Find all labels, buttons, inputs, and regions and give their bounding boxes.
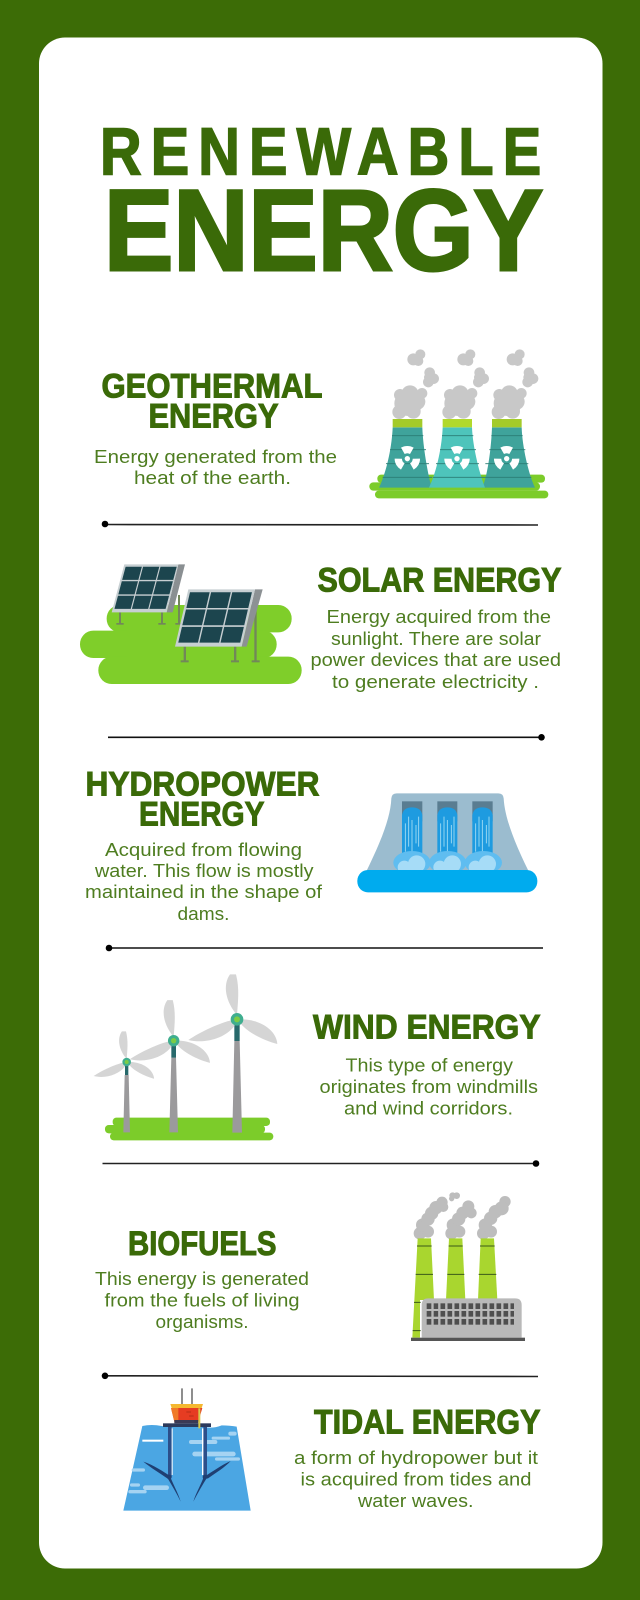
icon: cooling towers — [369, 349, 548, 498]
text: solar description: power devices that are used — [310, 649, 561, 670]
title: RENEWABLE — [100, 114, 541, 190]
text: hydropower description: water. This flow is mostly — [94, 860, 314, 881]
text: tidal description: water waves. — [357, 1490, 474, 1511]
text: solar description: to generate electricity . — [332, 671, 539, 692]
divider 2 — [108, 734, 545, 741]
icon: wind turbines — [94, 974, 277, 1140]
text: geothermal description — [94, 446, 337, 488]
panel: tidal energy — [123, 1388, 541, 1511]
panel: wind energy — [94, 974, 541, 1140]
text: hydropower description: Acquired from flowing — [105, 839, 302, 860]
heading: hydropower energy: HYDROPOWER — [86, 766, 320, 804]
text: solar description: sunlight. There are solar — [331, 628, 541, 649]
divider 4 — [102, 1160, 539, 1167]
heading: biofuels: BIOFUELS — [128, 1225, 276, 1263]
text: biofuels description — [95, 1268, 309, 1332]
panel: solar energy — [80, 562, 562, 692]
text: hydropower description: maintained in the shape of — [85, 881, 323, 902]
text: hydropower description — [85, 839, 323, 924]
panel: biofuels — [95, 1192, 525, 1341]
icon: tidal turbine — [123, 1388, 251, 1511]
text: wind description — [320, 1054, 538, 1118]
heading: hydropower energy — [86, 766, 320, 834]
title — [100, 114, 543, 295]
text: geothermal description: Energy generated from the — [94, 446, 337, 467]
panel: hydropower energy — [85, 766, 537, 924]
text: biofuels description: This energy is generated — [95, 1268, 309, 1289]
text: biofuels description: from the fuels of living — [104, 1290, 300, 1310]
text: solar description: Energy acquired from the — [326, 606, 551, 627]
text: wind description: and wind corridors. — [344, 1098, 513, 1118]
icon: solar panels — [80, 564, 302, 684]
heading: wind energy: WIND ENERGY — [313, 1008, 541, 1046]
heading: hydropower energy: ENERGY — [139, 796, 265, 834]
divider 5 — [102, 1372, 538, 1379]
text: biofuels description: organisms. — [156, 1311, 248, 1332]
heading: geothermal energy: ENERGY — [148, 398, 279, 436]
title: ENERGY — [104, 167, 543, 295]
heading: solar energy: SOLAR ENERGY — [318, 562, 562, 600]
text: geothermal description: heat of the earth. — [134, 467, 291, 488]
heading: tidal energy: TIDAL ENERGY — [314, 1404, 541, 1442]
icon: hydro dam — [357, 793, 537, 892]
text: tidal description: a form of hydropower but it — [294, 1447, 538, 1468]
text: hydropower description: dams. — [178, 903, 230, 924]
heading: geothermal energy: GEOTHERMAL — [102, 368, 322, 406]
divider 3 — [106, 945, 543, 951]
text: tidal description: is acquired from tides and — [300, 1468, 532, 1490]
text: tidal description — [294, 1447, 538, 1511]
text: wind description: This type of energy — [346, 1054, 514, 1076]
panel: geothermal energy — [94, 349, 548, 498]
divider 1 — [102, 521, 538, 527]
icon: factory — [411, 1192, 525, 1341]
heading: geothermal energy — [102, 368, 322, 436]
text: wind description: originates from windmills — [320, 1076, 538, 1097]
text: solar description — [310, 606, 561, 692]
